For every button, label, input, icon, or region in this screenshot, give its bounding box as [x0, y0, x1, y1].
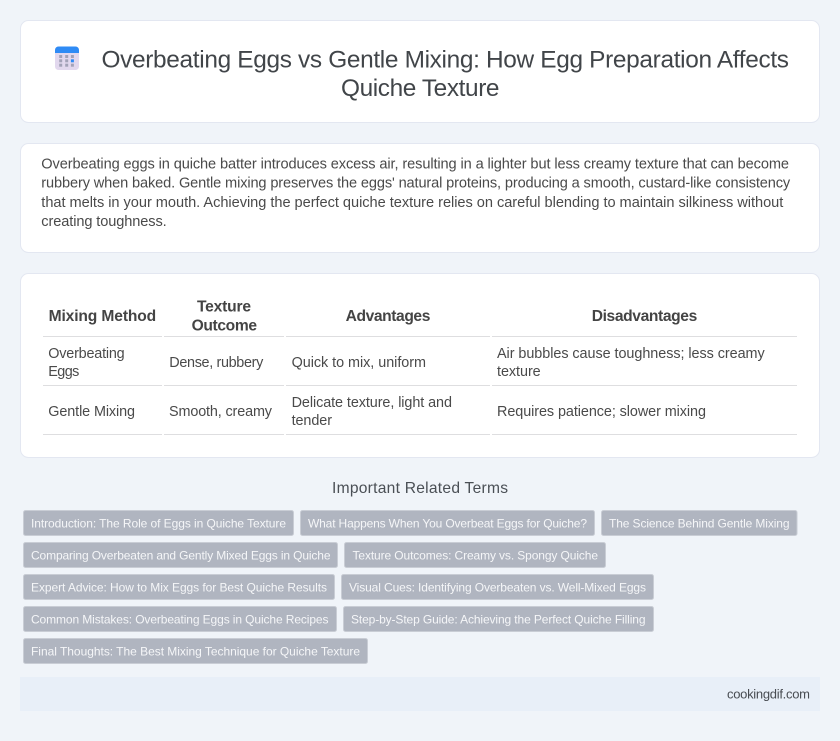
panel: introduction text: that melts in your mouth. Achieving the perfect quiche texture relies on careful blending to maintain silkiness without	[41, 195, 783, 211]
tag: final thoughts	[24, 638, 368, 664]
table row: gentle mixing: tender	[292, 413, 332, 429]
table header row: Texture	[197, 299, 251, 316]
table row: gentle mixing: Delicate texture, light and	[292, 395, 452, 411]
panel: comparison table	[20, 274, 820, 458]
table row: overbeating eggs: Air bubbles cause toughness; less creamy	[497, 346, 765, 362]
footer	[20, 677, 820, 711]
tag: final thoughts: Final Thoughts: The Best Mixing Technique for Quiche Texture	[31, 644, 360, 658]
table row: gentle mixing: Gentle Mixing	[48, 404, 135, 420]
related terms tags	[24, 510, 797, 664]
footer: cookingdif.com	[727, 686, 810, 701]
tag: introduction	[24, 510, 294, 536]
tag: what happens	[300, 510, 594, 536]
tag: texture outcomes: Texture Outcomes: Creamy vs. Spongy Quiche	[352, 548, 598, 562]
tag: expert advice: Expert Advice: How to Mix Eggs for Best Quiche Results	[31, 580, 327, 594]
panel: introduction text: rubbery when baked. Gentle mixing preserves the eggs' natural proteins, producing a smooth, custard-like consistency	[41, 176, 791, 192]
table row: gentle mixing	[48, 395, 706, 429]
table row: gentle mixing: Requires patience; slower mixing	[497, 404, 706, 420]
table header row: Advantages	[346, 308, 431, 325]
tag: common mistakes	[24, 606, 336, 632]
panel: introduction text	[20, 144, 820, 252]
tag: what happens: What Happens When You Overbeat Eggs for Quiche?	[308, 516, 587, 530]
tag: visual cues	[342, 574, 654, 600]
tag: the science: The Science Behind Gentle Mixing	[609, 516, 790, 530]
tag: introduction: Introduction: The Role of Eggs in Quiche Texture	[31, 516, 286, 530]
tag: comparing	[24, 542, 338, 568]
table row: overbeating eggs	[48, 346, 765, 380]
table row: overbeating eggs: texture	[497, 364, 541, 380]
tag: common mistakes: Common Mistakes: Overbeating Eggs in Quiche Recipes	[31, 612, 328, 626]
panel: introduction text: creating toughness.	[41, 214, 167, 230]
tag: visual cues: Visual Cues: Identifying Overbeaten vs. Well-Mixed Eggs	[349, 580, 646, 594]
table row: overbeating eggs: Quick to mix, uniform	[292, 355, 426, 371]
panel: introduction text: Overbeating eggs in quiche batter introduces excess air, resulting in a lighter but less creamy texture that can become	[41, 156, 789, 172]
tag: step-by-step: Step-by-Step Guide: Achieving the Perfect Quiche Filling	[351, 612, 646, 626]
title: Quiche Texture	[341, 75, 500, 102]
panel: header	[20, 20, 820, 122]
table header row: Disadvantages	[592, 308, 698, 325]
table header row: Outcome	[192, 318, 257, 335]
tag: the science	[602, 510, 797, 536]
tag: comparing: Comparing Overbeaten and Gently Mixed Eggs in Quiche	[31, 548, 331, 562]
title: Overbeating Eggs vs Gentle Mixing: How Egg Preparation Affects	[102, 46, 789, 74]
table row: overbeating eggs: Overbeating	[48, 346, 125, 362]
tag: texture outcomes	[344, 542, 606, 568]
table row: overbeating eggs: Dense, rubbery	[169, 355, 264, 371]
tag: step-by-step	[344, 606, 654, 632]
table row: gentle mixing: Smooth, creamy	[169, 404, 273, 420]
title	[102, 46, 789, 102]
table header row	[49, 299, 698, 335]
icon: calendar	[55, 46, 79, 70]
table header row: Mixing Method	[49, 308, 156, 325]
table row: overbeating eggs: Eggs	[48, 364, 79, 380]
heading: important related terms: Important Related Terms	[332, 480, 508, 497]
tag: expert advice	[24, 574, 334, 600]
